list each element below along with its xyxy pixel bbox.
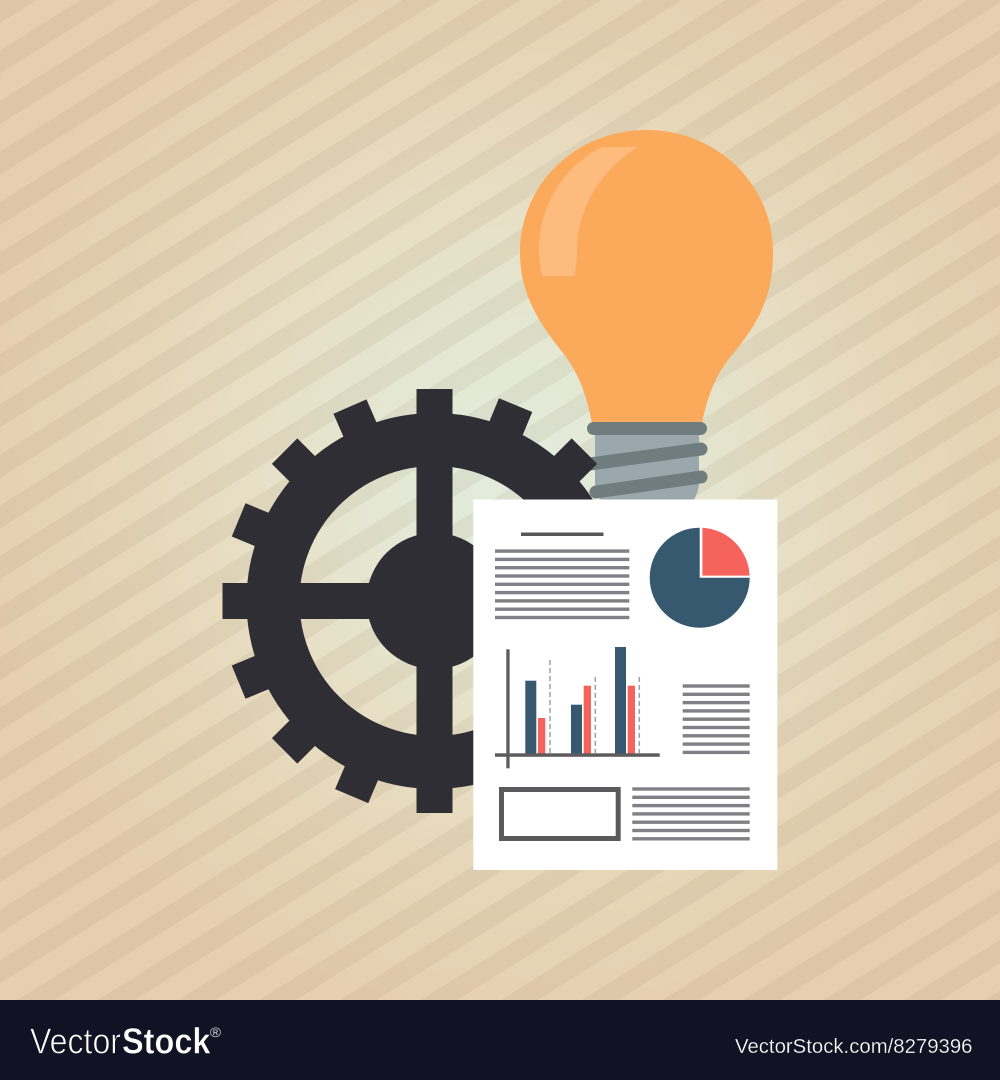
gear spokes	[283, 450, 586, 752]
screw thread lower	[596, 477, 701, 492]
panel: report document	[473, 500, 777, 870]
red bars	[538, 686, 635, 754]
icon: gear	[222, 389, 646, 813]
gear teeth	[222, 389, 646, 813]
logo: VectorStock: Stock	[122, 1020, 211, 1062]
dashed guide lines	[550, 660, 639, 753]
screw thread upper	[590, 449, 701, 464]
image id text: VectorStock.com/8279396	[735, 1036, 972, 1058]
text block: chart caption lines	[683, 684, 750, 754]
icon: light bulb	[520, 130, 773, 500]
logo: VectorStock: ®	[210, 1024, 222, 1040]
footer bar	[0, 1000, 1000, 1080]
pie chart	[650, 528, 750, 628]
logo: VectorStock	[30, 1020, 222, 1062]
bulb screw base	[595, 430, 699, 500]
chart axes	[495, 649, 660, 768]
bulb highlight	[539, 147, 638, 276]
gear rim	[273, 440, 596, 762]
logo: VectorStock: Vector	[30, 1020, 121, 1062]
gear hub	[366, 533, 502, 669]
outlined empty box	[502, 790, 618, 838]
footer background	[0, 1000, 1000, 1080]
document title line	[521, 532, 604, 536]
bulb collar	[587, 422, 707, 435]
text block: footer lines	[632, 787, 750, 840]
text block: intro lines	[495, 549, 629, 619]
blue bars	[525, 647, 626, 754]
document sheet	[473, 500, 777, 870]
bar chart	[495, 647, 660, 768]
bulb glass	[520, 130, 773, 423]
pie slice: red quarter	[702, 528, 750, 576]
pie slice: large blue	[650, 528, 750, 628]
